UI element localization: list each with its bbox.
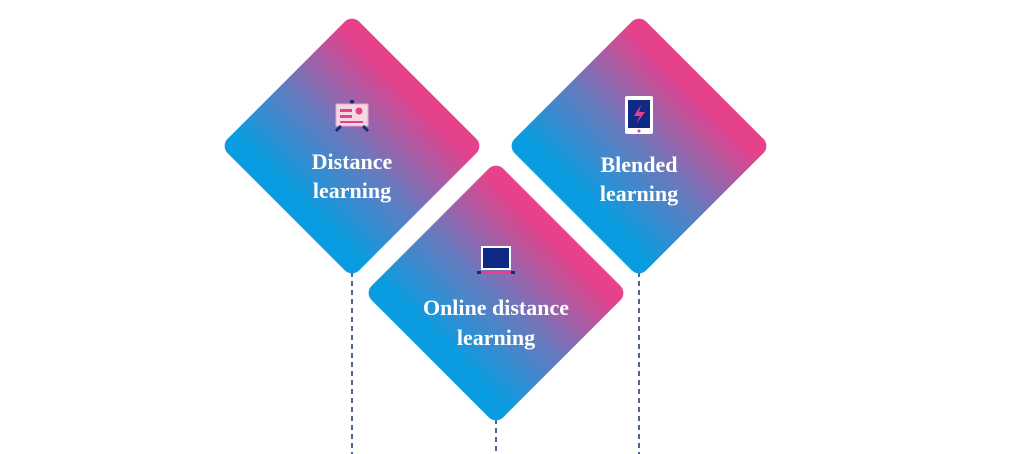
heading: distance learning: Distance: [312, 149, 393, 174]
panel: online distance learning: learning: [457, 325, 535, 350]
panel: distance learning: learning: [313, 178, 391, 203]
dashed line: distance: [351, 272, 353, 454]
panel: blended learning: learning: [600, 181, 678, 206]
heading: blended learning: Blended: [600, 152, 678, 177]
panel: blended learning: [507, 14, 771, 278]
heading: online distance learning: Online distance: [423, 295, 569, 320]
panel: distance learning: [220, 14, 484, 278]
icon: tablet: [625, 96, 653, 134]
icon: easel: [336, 100, 368, 131]
icon: laptop: [477, 246, 515, 274]
panel: online distance learning: [364, 161, 628, 425]
dashed line: online: [495, 419, 497, 454]
dashed line: blended: [638, 272, 640, 454]
